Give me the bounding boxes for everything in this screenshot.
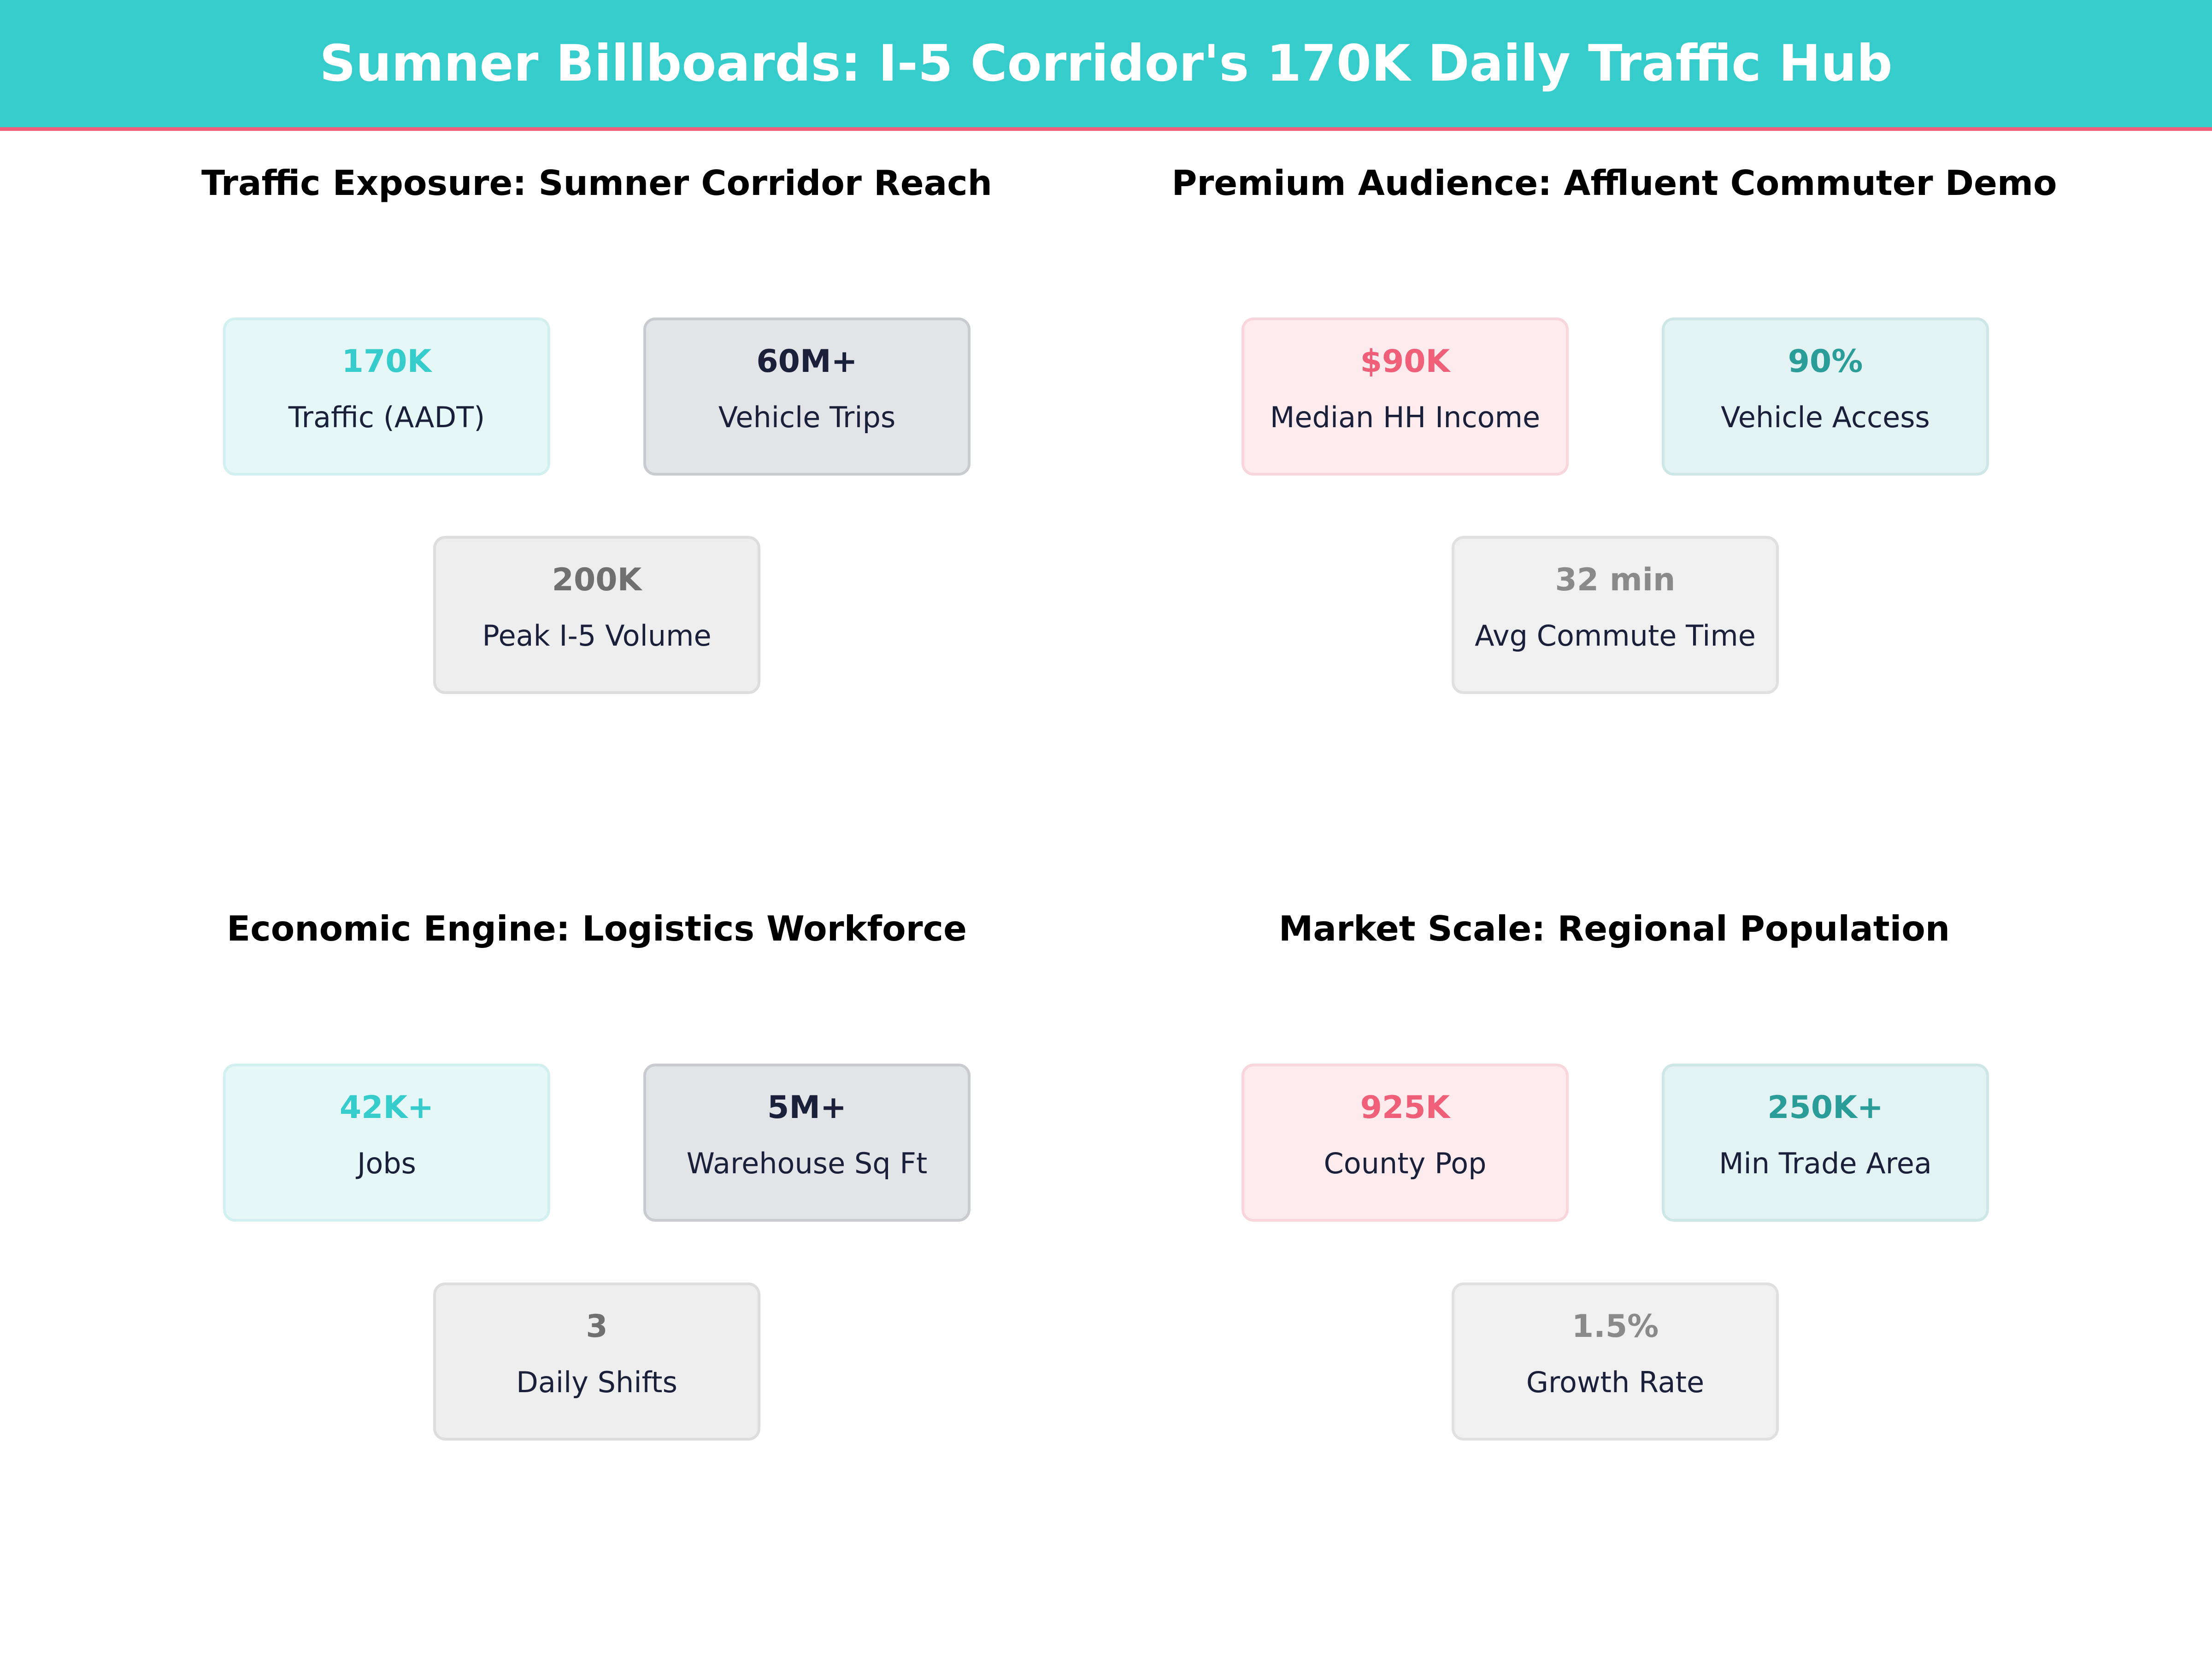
header bar bbox=[0, 0, 2212, 131]
panel: market scale bbox=[1106, 908, 2212, 1484]
card: 925K bbox=[1241, 1064, 1569, 1222]
card: 200K: 200K bbox=[552, 562, 641, 598]
card: 42K+: Jobs bbox=[357, 1147, 416, 1180]
card: 1.5% bbox=[1452, 1282, 1779, 1441]
card: 5M+: Warehouse Sq Ft bbox=[687, 1147, 927, 1180]
card: 3: Daily Shifts bbox=[516, 1365, 677, 1399]
heading: market scale: Market Scale: Regional Population bbox=[1279, 908, 1950, 949]
card: 170K: 170K bbox=[342, 343, 431, 380]
card: 1.5%: Growth Rate bbox=[1526, 1365, 1704, 1399]
card: 200K: Peak I-5 Volume bbox=[482, 619, 712, 653]
title: Sumner Billboards: I-5 Corridor's 170K Daily Traffic Hub bbox=[319, 34, 1893, 93]
card: 42K+: 42K+ bbox=[340, 1089, 434, 1126]
card: $90K: $90K bbox=[1360, 343, 1450, 380]
card: 90%: 90% bbox=[1788, 343, 1863, 380]
card: $90K: Median HH Income bbox=[1270, 400, 1540, 434]
card: 250K+: Min Trade Area bbox=[1719, 1147, 1932, 1180]
card: 32 min: 32 min bbox=[1555, 562, 1675, 598]
card: 3 bbox=[433, 1282, 760, 1441]
card: 170K: Traffic (AADT) bbox=[288, 400, 485, 434]
card: 925K: 925K bbox=[1360, 1089, 1450, 1126]
card: 5M+ bbox=[643, 1064, 971, 1222]
card: 60M+: Vehicle Trips bbox=[718, 400, 895, 434]
heading: premium audience: Premium Audience: Affluent Commuter Demo bbox=[1171, 163, 2057, 203]
card: 250K+: 250K+ bbox=[1767, 1089, 1883, 1126]
heading: traffic exposure: Traffic Exposure: Sumner Corridor Reach bbox=[201, 163, 992, 203]
card: 60M+: 60M+ bbox=[756, 343, 858, 380]
card: 250K+ bbox=[1662, 1064, 1989, 1222]
card: 200K bbox=[433, 536, 760, 694]
card: 42K+ bbox=[223, 1064, 550, 1222]
panel: economic engine bbox=[0, 908, 1106, 1484]
card: 5M+: 5M+ bbox=[767, 1089, 847, 1126]
panel: premium audience bbox=[1106, 162, 2212, 738]
card: 90%: Vehicle Access bbox=[1721, 400, 1930, 434]
card: 60M+ bbox=[643, 318, 971, 476]
card: 170K bbox=[223, 318, 550, 476]
panel: traffic exposure bbox=[0, 162, 1106, 738]
card: $90K bbox=[1241, 318, 1569, 476]
card: 1.5%: 1.5% bbox=[1572, 1308, 1659, 1345]
card: 90% bbox=[1662, 318, 1989, 476]
card: 32 min: Avg Commute Time bbox=[1475, 619, 1756, 653]
heading: economic engine: Economic Engine: Logistics Workforce bbox=[227, 908, 967, 949]
card: 32 min bbox=[1452, 536, 1779, 694]
card: 3: 3 bbox=[586, 1308, 608, 1345]
card: 925K: County Pop bbox=[1324, 1147, 1487, 1180]
